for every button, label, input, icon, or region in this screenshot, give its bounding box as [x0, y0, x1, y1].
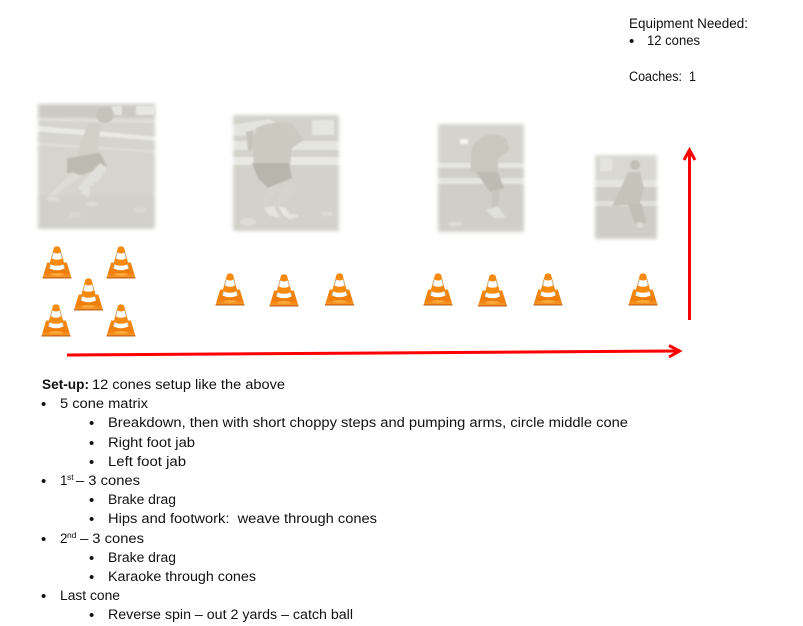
first three cones list: st — [67, 472, 74, 482]
photo: athlete at cone matrix — [36, 102, 157, 231]
5 cone matrix list: Right foot jab — [108, 435, 195, 450]
first three cones list: • — [41, 473, 46, 490]
equipment needed text block: Equipment Needed: — [629, 16, 748, 31]
arrow: horizontal red arrow — [67, 346, 680, 357]
set-up heading: Set-up: — [42, 377, 89, 392]
equipment needed text block: Coaches: 1 — [629, 69, 696, 84]
5 cone matrix list: Left foot jab — [108, 454, 186, 469]
last cone list — [41, 588, 353, 624]
equipment needed text block: • — [629, 33, 634, 50]
second three cones list: • — [41, 531, 46, 548]
first three cones — [216, 273, 354, 306]
last cone list: • — [41, 588, 46, 605]
last cone — [628, 273, 658, 306]
last cone list: Last cone — [60, 588, 120, 603]
set-up heading: 12 cones setup like the above — [92, 377, 285, 392]
photo: athlete at second three cones — [436, 122, 526, 234]
first three cones list: Brake drag — [108, 492, 176, 507]
second three cones list — [41, 530, 256, 586]
first three cones list: Hips and footwork: weave through cones — [108, 511, 377, 526]
arrow: vertical red arrow — [684, 150, 695, 320]
second three cones list: • — [89, 569, 94, 586]
equipment needed text block: 12 cones — [647, 33, 700, 48]
first three cones list: 1 — [60, 473, 67, 488]
5 cone matrix list: • — [89, 454, 94, 471]
second three cones list: • — [89, 550, 94, 567]
5 cone matrix list: • — [89, 435, 94, 452]
first three cones list: • — [89, 492, 94, 509]
equipment needed text block — [629, 16, 748, 84]
set-up instructions — [41, 377, 628, 624]
first three cones list: • — [89, 511, 94, 528]
second three cones list: 2 — [60, 531, 67, 546]
photo: athlete at last cone — [593, 154, 659, 241]
cone matrix: five cones — [42, 246, 136, 336]
second three cones list: Brake drag — [108, 550, 176, 565]
5 cone matrix list: 5 cone matrix — [60, 396, 148, 411]
first three cones list: – 3 cones — [76, 473, 140, 488]
5 cone matrix list — [41, 396, 628, 471]
first three cones list — [41, 472, 377, 528]
second three cones — [424, 273, 562, 306]
second three cones list: Karaoke through cones — [108, 569, 256, 584]
5 cone matrix list: • — [41, 396, 46, 413]
second three cones list: nd — [67, 530, 77, 540]
photo: athlete at first three cones — [231, 113, 341, 233]
second three cones list: – 3 cones — [80, 531, 144, 546]
last cone list: • — [89, 607, 94, 624]
last cone list: Reverse spin – out 2 yards – catch ball — [108, 607, 353, 622]
5 cone matrix list: Breakdown, then with short choppy steps and pumping arms, circle middle cone — [108, 415, 628, 430]
5 cone matrix list: • — [89, 415, 94, 432]
